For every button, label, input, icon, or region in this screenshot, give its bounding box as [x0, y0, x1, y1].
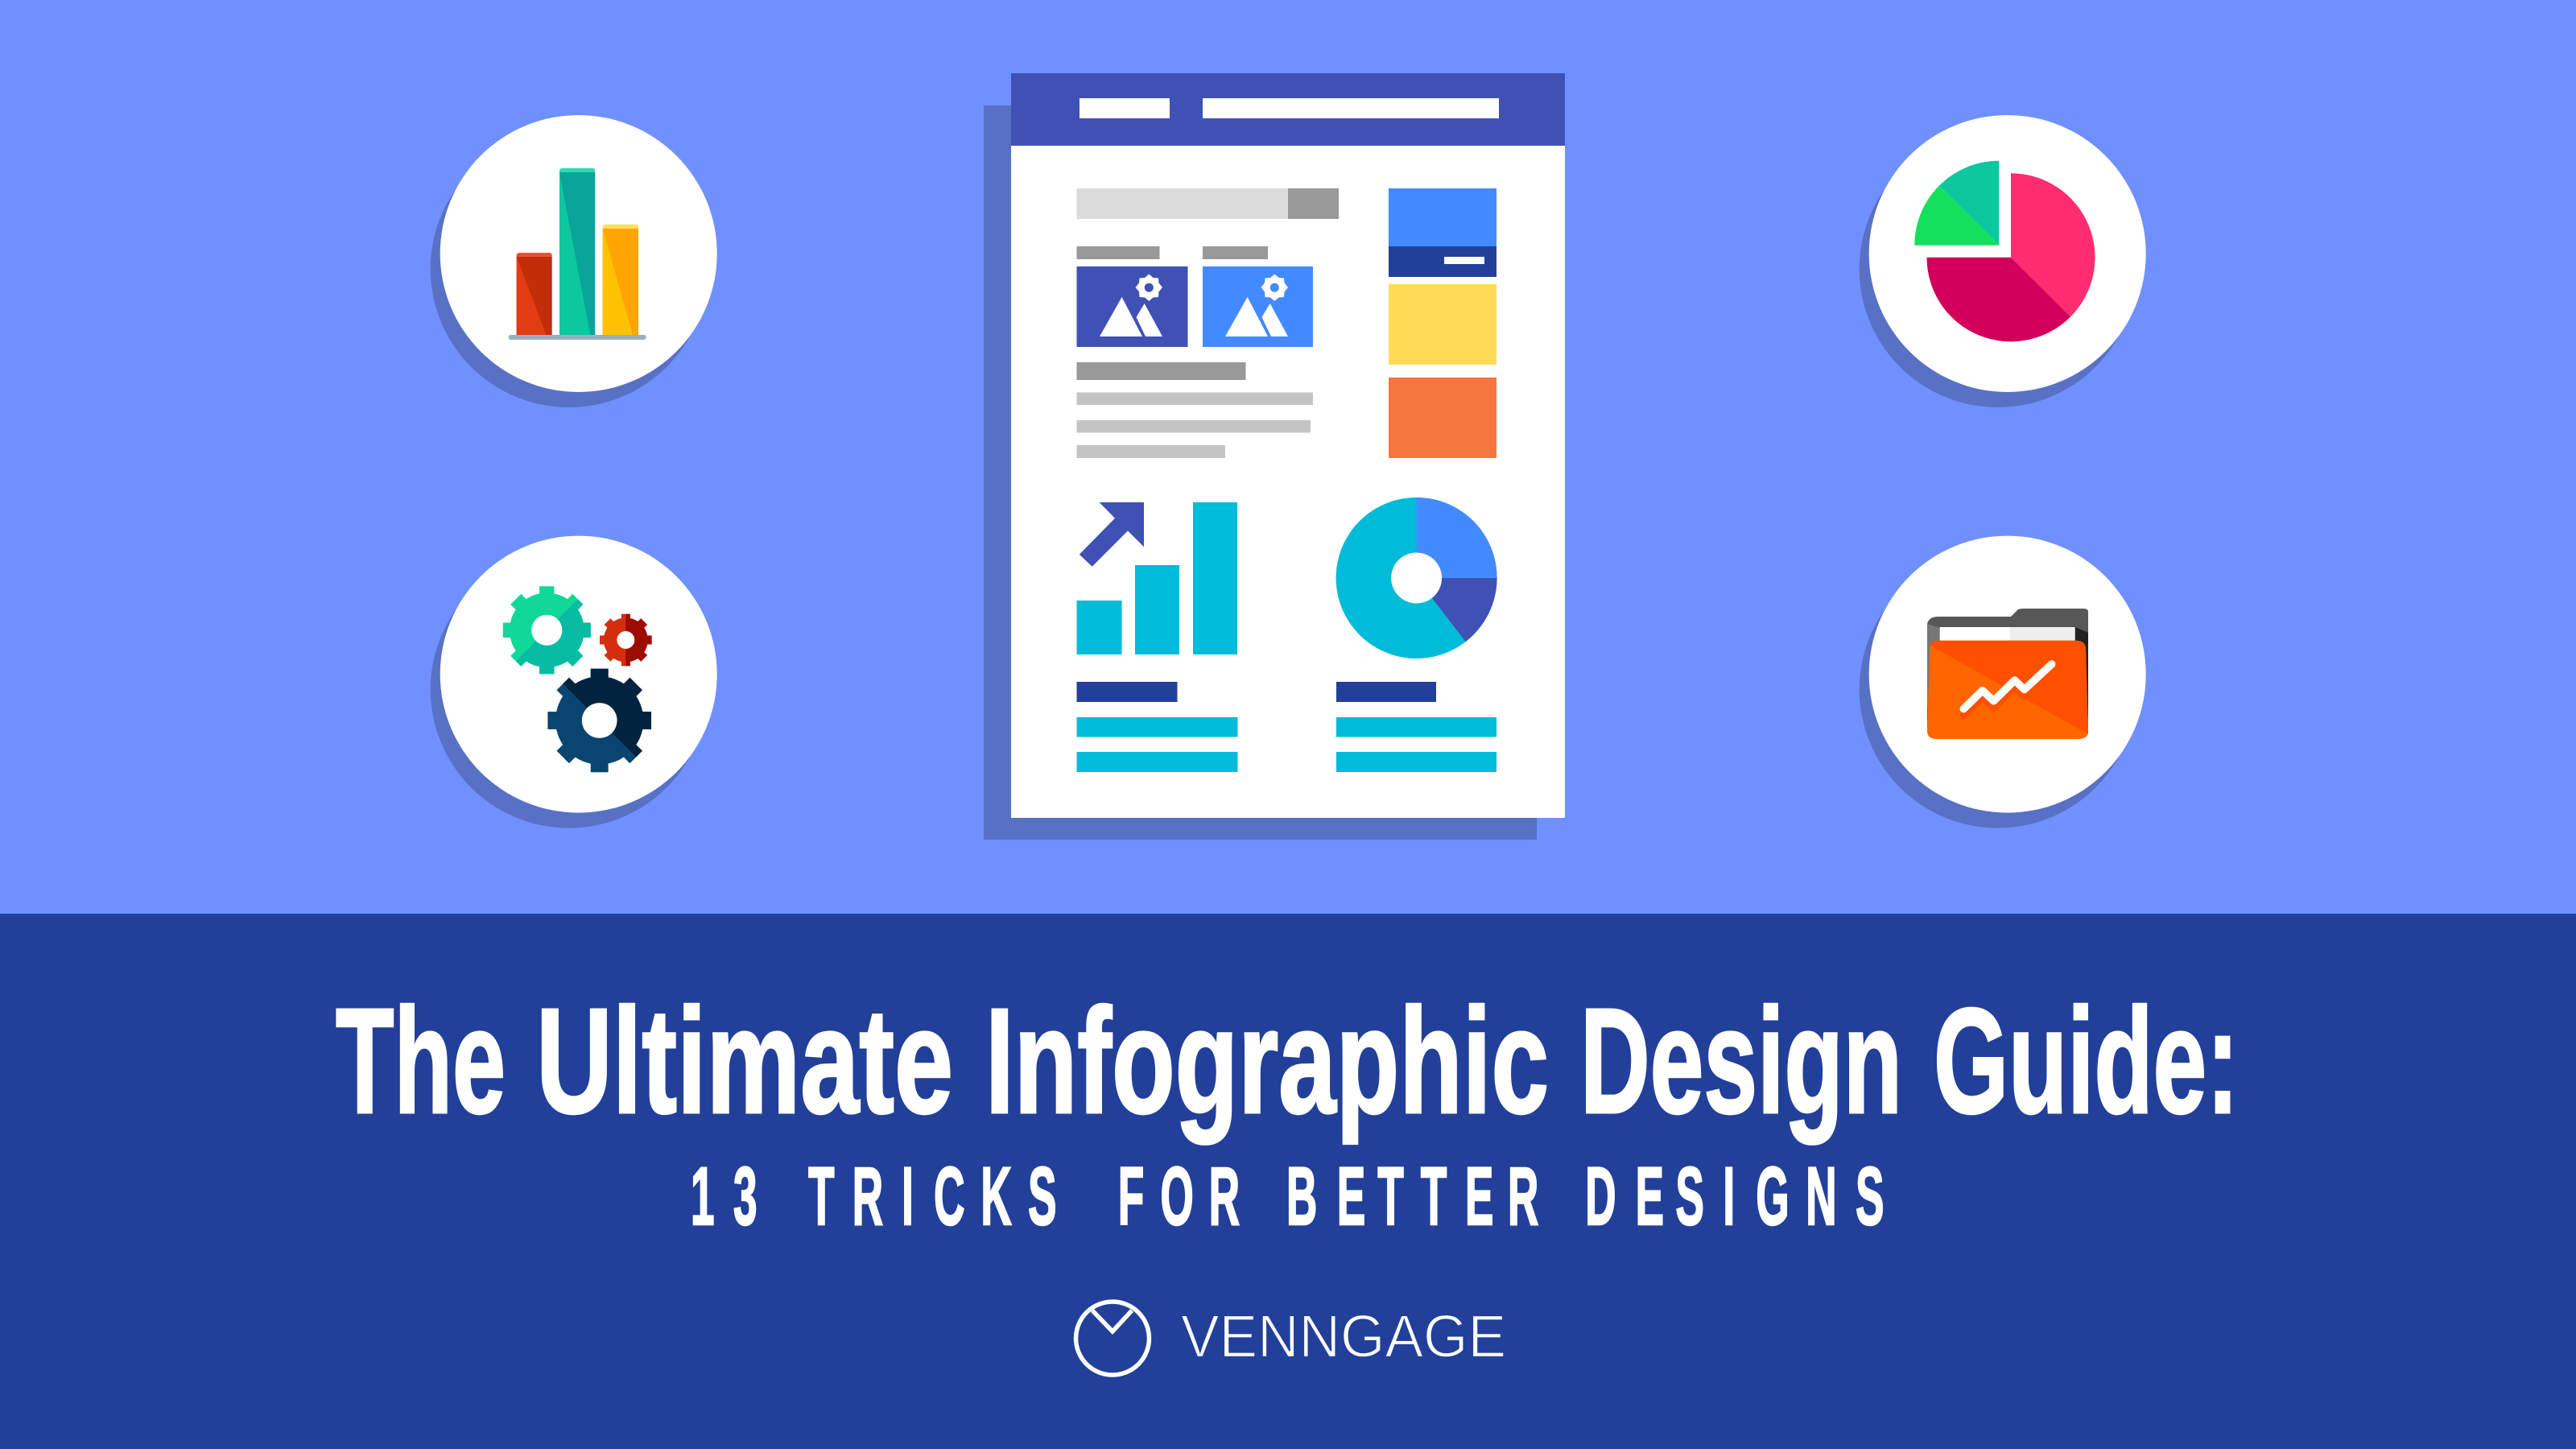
document page — [1011, 73, 1565, 818]
logo wordmark: VENNGAGE — [1181, 1303, 1506, 1370]
title: Ultimate — [536, 978, 953, 1145]
colour swatches — [1389, 188, 1496, 458]
subtitle: 13 TRICKS FOR BETTER DESIGNS — [691, 1150, 1885, 1243]
title: Guide: — [1934, 978, 2239, 1145]
caption lines left — [1077, 682, 1238, 772]
title: Infographic — [985, 978, 1549, 1145]
navy gear — [547, 669, 651, 772]
icon: pie chart in circle — [1860, 115, 2146, 407]
document shadow — [984, 105, 1537, 840]
progress bar — [1077, 188, 1339, 219]
donut chart — [1336, 497, 1497, 658]
text placeholder lines — [1077, 362, 1313, 458]
title: Design — [1580, 978, 1902, 1145]
caption lines right — [1336, 682, 1496, 772]
footer band: navy — [0, 914, 2576, 1449]
image placeholder one — [1077, 246, 1188, 347]
red gear — [600, 614, 652, 666]
background: periwinkle upper area — [0, 0, 2576, 914]
icon: folder with trend line in circle — [1860, 536, 2146, 828]
icon: bar chart in circle — [431, 115, 717, 407]
image placeholder two — [1203, 246, 1313, 347]
panel: document illustration — [984, 73, 1565, 840]
title: The — [336, 978, 506, 1145]
document header bar — [1011, 73, 1565, 146]
logo: Venngage clock mark — [1075, 1302, 1150, 1375]
icon: gears in circle — [431, 536, 717, 828]
green gear — [503, 586, 591, 674]
bar chart with growth arrow — [1077, 502, 1237, 654]
